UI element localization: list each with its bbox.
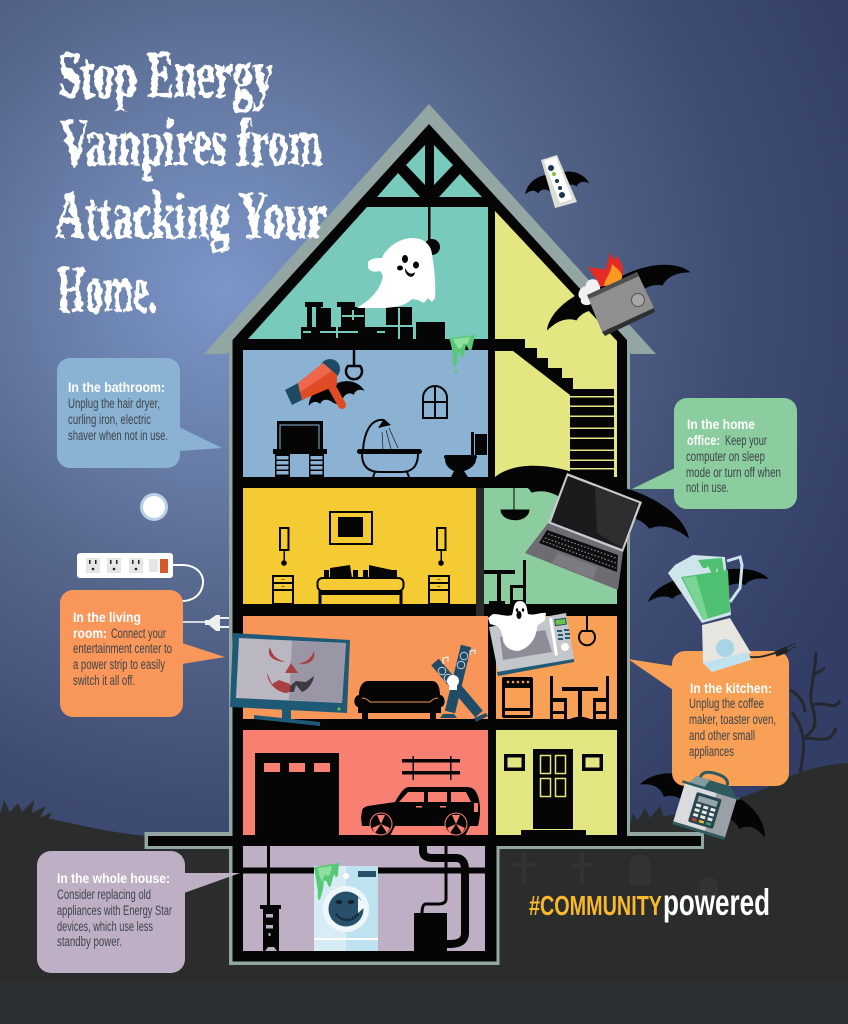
callout: living room: room:	[73, 625, 107, 641]
bat behind hair dryer	[304, 373, 366, 412]
hair dryer	[285, 359, 342, 405]
bat behind router	[522, 164, 590, 201]
callout: bathroom: shaver when not in use.	[68, 428, 168, 443]
callout: home office: not in use.	[686, 480, 729, 495]
car	[361, 787, 480, 836]
campaign hashtag	[529, 882, 770, 923]
handle	[727, 557, 742, 602]
desk	[484, 570, 515, 604]
dark divider wall	[476, 488, 484, 616]
stored boxes	[301, 302, 445, 339]
campaign hashtag: powered	[663, 882, 770, 923]
pressure cooker	[670, 765, 745, 841]
ghost	[357, 238, 435, 308]
callout: kitchen: and other small	[689, 728, 755, 743]
callout: home office	[632, 398, 797, 509]
lamp	[424, 207, 440, 255]
home office room	[484, 488, 617, 604]
basement structure	[232, 846, 496, 962]
callout: whole house: standby power.	[57, 934, 122, 949]
callout: kitchen: maker, toaster oven,	[689, 712, 776, 727]
callout: home office: Keep your	[725, 433, 767, 448]
flames	[588, 252, 623, 287]
left wall sconce	[280, 528, 288, 566]
base	[702, 618, 751, 672]
title: Attacking Your	[55, 177, 326, 253]
callout: home office: In the home	[687, 416, 755, 432]
sump tank	[414, 913, 447, 953]
foundation plate	[148, 836, 701, 846]
callout: kitchen: In the kitchen:	[690, 680, 772, 696]
bat behind blender	[644, 558, 770, 610]
callout: home office: mode or turn off when	[686, 465, 781, 480]
dining set	[550, 676, 609, 719]
black structure	[232, 124, 627, 836]
callout: kitchen	[628, 651, 789, 786]
callout: whole house: In the whole house:	[57, 870, 170, 886]
bat behind toaster	[536, 246, 694, 340]
callout: bathroom: curling iron, electric	[68, 412, 151, 427]
router	[541, 155, 577, 208]
right nightstand	[429, 576, 449, 604]
living room orange	[243, 616, 488, 719]
cord and plug	[750, 653, 775, 657]
sofa	[354, 681, 445, 719]
callout: living room: switch it all off.	[73, 673, 135, 688]
outer wall trim	[229, 340, 630, 840]
title	[55, 36, 326, 327]
handle	[700, 770, 729, 785]
tombstones and crosses	[513, 853, 718, 900]
microwave	[488, 601, 574, 676]
callout: living room: Connect your	[111, 626, 166, 641]
smoke	[579, 279, 600, 305]
callout: living room: entertainment center to	[73, 641, 172, 656]
wall rack	[402, 756, 460, 780]
stove	[502, 677, 533, 718]
moon	[140, 493, 168, 521]
bathtub	[357, 419, 422, 477]
microwave ghost	[488, 601, 546, 651]
ceiling lamp	[346, 350, 362, 379]
callout: whole house	[37, 851, 240, 973]
bat behind laptop	[489, 443, 700, 551]
window	[423, 386, 447, 418]
callout: living room: In the living	[73, 609, 141, 625]
speaker feet	[440, 713, 488, 722]
callout: living room	[60, 590, 225, 717]
callout: kitchen: Unplug the coffee	[689, 696, 764, 711]
entry hall	[496, 730, 617, 835]
callout: whole house: devices, which use less	[57, 919, 153, 934]
grass left	[0, 800, 60, 826]
chair	[510, 560, 526, 604]
gable windows	[377, 145, 482, 197]
title: Stop Energy	[58, 36, 273, 112]
power strip	[77, 553, 203, 601]
living room yellow	[243, 488, 476, 604]
basement trim	[229, 845, 500, 965]
music notes	[443, 650, 475, 664]
callout: bathroom	[57, 358, 222, 468]
front door	[521, 749, 586, 835]
upper stairwell room	[495, 211, 617, 477]
roof	[204, 104, 656, 354]
toaster	[579, 252, 655, 336]
bat behind pressure cooker	[635, 753, 778, 849]
title: Vampires from	[60, 104, 323, 180]
basement	[243, 846, 485, 953]
callout: bathroom: In the bathroom:	[68, 379, 165, 395]
tv	[230, 633, 350, 726]
skull	[447, 675, 459, 690]
callout: whole house: Consider replacing old	[57, 887, 151, 902]
jar	[668, 555, 731, 623]
kitchen room	[496, 616, 617, 719]
bed	[318, 565, 404, 604]
washer slime	[314, 863, 339, 900]
lid	[688, 774, 740, 799]
laptop	[525, 473, 642, 590]
box ribbons	[303, 308, 412, 339]
right window	[582, 754, 603, 771]
callout: living room: a power strip to easily	[73, 657, 165, 672]
callout: home office: computer on sleep	[686, 449, 765, 464]
unplugged plug	[183, 615, 229, 631]
left window	[504, 754, 525, 771]
campaign hashtag: #COMMUNITY	[529, 890, 662, 921]
ceiling slime	[449, 335, 475, 373]
cord	[172, 565, 203, 601]
house shell	[144, 104, 704, 965]
control panel	[688, 792, 722, 829]
blender	[668, 555, 796, 672]
callout: kitchen: appliances	[689, 744, 734, 759]
dead tree	[790, 652, 840, 772]
pendant lamp	[501, 488, 529, 520]
toilet	[444, 432, 487, 477]
water heater	[260, 905, 281, 951]
garage door	[255, 753, 339, 835]
attic room	[248, 207, 488, 339]
callout: bathroom: Unplug the hair dryer,	[68, 396, 160, 411]
callout: home office: office:	[687, 432, 720, 448]
grass right	[630, 806, 680, 830]
stair rails	[570, 396, 615, 470]
left nightstand	[273, 576, 293, 604]
washing machine	[314, 866, 378, 951]
garage	[243, 730, 488, 836]
foundation plate trim	[144, 832, 704, 849]
ground and graveyard	[0, 652, 848, 1024]
wall artwork	[330, 512, 372, 544]
callout: whole house: appliances with Energy Star	[57, 903, 172, 918]
kitchen lamp	[579, 616, 595, 645]
speakers	[435, 646, 488, 722]
jack-o-lantern face	[269, 647, 314, 664]
right wall sconce	[437, 528, 446, 566]
title: Home.	[57, 251, 158, 327]
body	[673, 783, 737, 839]
laptop keys	[543, 534, 616, 568]
vanity	[273, 421, 327, 477]
pipes	[243, 846, 485, 944]
bathroom	[243, 350, 488, 477]
